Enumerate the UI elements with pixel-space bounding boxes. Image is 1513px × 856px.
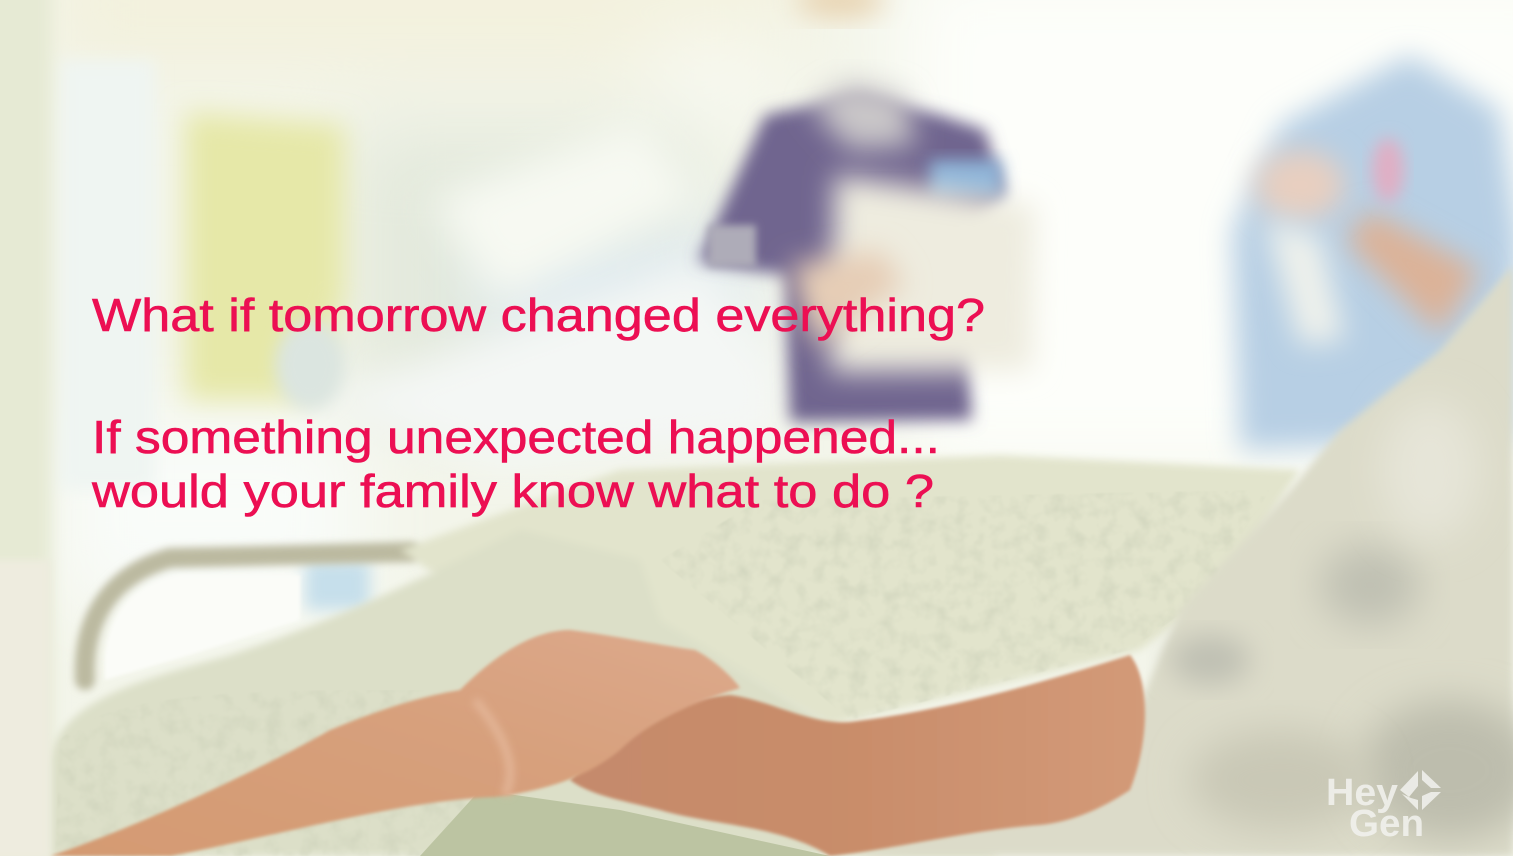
bed frame rail [85,552,410,680]
patient forearm and hand [570,655,1145,856]
body question [91,411,940,517]
white opening under rail [104,575,300,680]
logo: HeyGen watermark [1326,770,1441,845]
nurse one in purple uniform [698,0,1035,422]
headline question: What if tomorrow changed everything? [92,289,985,341]
icon: logo diamond [1400,770,1441,810]
left lower floor [0,560,50,856]
patient gown [850,265,1513,856]
logo: HeyGen watermark: Gen [1349,803,1424,845]
body question: would your family know what to do ? [91,465,934,517]
bed blanket near [50,530,1000,856]
blue accent behind bed [275,320,370,610]
left door frame [0,0,155,856]
nurse two in blue uniform [1232,55,1513,450]
logo: HeyGen watermark: Hey [1326,772,1398,814]
hand shading [475,700,510,795]
hospital room wall and ceiling [50,0,1513,610]
visitor forearm and hand [50,630,740,856]
body question: If something unexpected happened... [92,411,940,463]
yellow panel [185,112,345,400]
pale window streak [430,120,700,300]
bed blanket far [400,455,1300,725]
